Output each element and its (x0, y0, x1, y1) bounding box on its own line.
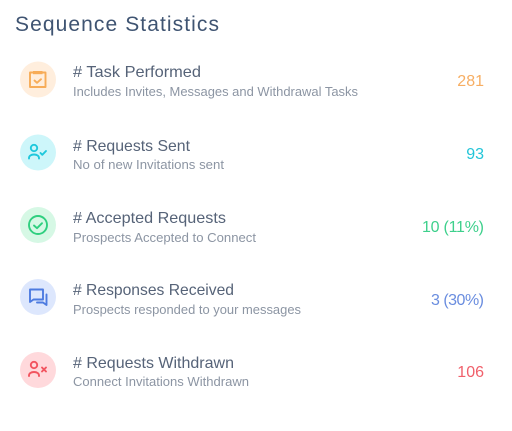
description: No of new Invitations sent (73, 158, 225, 172)
title: Sequence Statistics (15, 13, 219, 36)
label: # Accepted Requests (73, 210, 226, 227)
row: accepted requests (20, 207, 484, 245)
row: requests withdrawn (20, 352, 484, 389)
row: requests sent (20, 134, 484, 172)
label: # Requests Sent (73, 138, 191, 155)
icon: clipboard check (20, 62, 56, 98)
value: 3 (30%) (431, 292, 484, 309)
label: # Task Performed (73, 64, 201, 81)
description: Connect Invitations Withdrawn (73, 375, 249, 389)
description: Prospects Accepted to Connect (73, 231, 257, 245)
description: Prospects responded to your messages (73, 303, 301, 317)
label: # Requests Withdrawn (73, 355, 234, 372)
value: 10 (11%) (422, 219, 484, 236)
label: # Responses Received (73, 282, 234, 299)
icon: user check (20, 134, 56, 170)
description: Includes Invites, Messages and Withdrawal Tasks (73, 85, 358, 99)
value: 281 (457, 73, 484, 90)
value: 93 (466, 146, 484, 163)
icon: user remove (20, 352, 56, 388)
value: 106 (457, 364, 484, 381)
row: responses received (20, 279, 484, 317)
icon: check circle (20, 207, 56, 243)
icon: chat bubbles (20, 279, 56, 315)
row: task performed (20, 62, 484, 99)
